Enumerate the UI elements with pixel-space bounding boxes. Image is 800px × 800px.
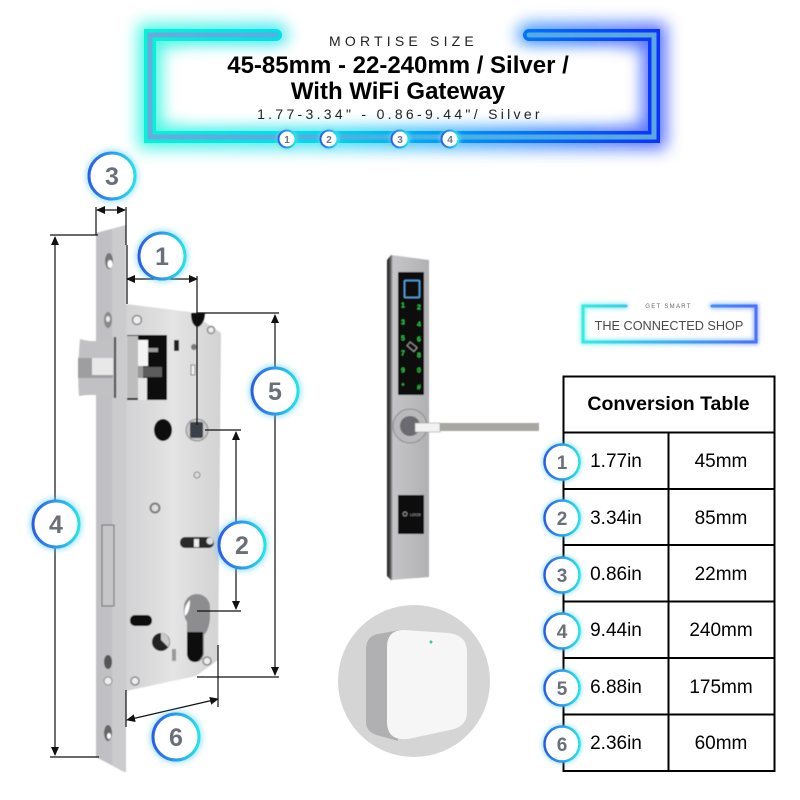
badge 2: [216, 519, 268, 571]
table row badges: 1: [557, 453, 568, 474]
table values: 60mm: [695, 733, 747, 754]
table values: 0.86in: [590, 564, 642, 585]
mortise lock body: [78, 225, 221, 772]
dimension 3 lines: [96, 207, 126, 245]
table values: 240mm: [689, 620, 753, 641]
table row badges: 6: [557, 735, 567, 756]
subtitle: mortise size: MORTISE SIZE: [329, 33, 478, 49]
keypad screen: 7: [401, 350, 405, 358]
lock label panel: LOCK: [410, 512, 421, 517]
frame step markers: 1: [284, 135, 290, 146]
cylinder cutout: [184, 594, 210, 662]
dimension 5 lines: [197, 313, 279, 677]
keypad screen: 1: [401, 302, 405, 310]
lever handle: [393, 409, 539, 443]
title text: [227, 52, 569, 105]
status led: [430, 640, 432, 644]
gateway backdrop circle: [338, 605, 490, 757]
conversion table: [542, 376, 775, 771]
badge 3: 3: [105, 163, 119, 191]
dimension 1 lines: [127, 245, 197, 425]
dimension 2 lines: [197, 430, 241, 611]
badge 4: [30, 498, 82, 550]
smart door lock: [387, 255, 539, 580]
table values: 9.44in: [590, 620, 642, 641]
keypad screen: 3: [401, 320, 405, 326]
keypad screen: 2: [417, 304, 421, 312]
table values: 3.34in: [590, 508, 642, 529]
latch window: [127, 335, 167, 400]
dimension 6 lines: [126, 645, 218, 727]
keypad screen: #: [417, 384, 421, 392]
table values: [590, 451, 753, 754]
frame step markers: 4: [447, 135, 453, 146]
keypad screen: 5: [401, 336, 405, 342]
brand logo: GET SMART: [645, 304, 692, 310]
lock label panel: [398, 495, 424, 534]
badge 6: 6: [169, 724, 183, 752]
badge 1: [136, 230, 188, 282]
keypad screen: 6: [417, 336, 421, 344]
title text: With WiFi Gateway: [291, 78, 506, 105]
keypad screen: *: [402, 383, 405, 390]
table row badges: 5: [557, 679, 568, 700]
table grid: [563, 376, 775, 771]
keypad screen: 0: [417, 368, 421, 374]
table values: 175mm: [689, 677, 753, 698]
badge 2: 2: [235, 532, 249, 560]
screws and holes: [102, 253, 214, 741]
table values: 1.77in: [590, 451, 642, 472]
badge 5: 5: [268, 378, 282, 406]
badge 4: 4: [49, 511, 63, 539]
lock plate: [387, 255, 429, 580]
wifi gateway: [338, 605, 490, 757]
table heading: Conversion Table: [587, 393, 750, 415]
frame step markers: 3: [397, 135, 403, 146]
table values: 45mm: [695, 451, 747, 472]
keypad screen: [398, 272, 424, 395]
keypad screen: 9: [401, 368, 405, 374]
badge 5: [249, 365, 301, 417]
gateway side: [366, 630, 400, 741]
badge 3: [86, 150, 138, 202]
table values: 2.36in: [590, 733, 642, 754]
table row badges: 2: [557, 509, 567, 530]
frame step markers: 2: [326, 135, 332, 146]
table values: 22mm: [695, 564, 747, 585]
inch size line: 1.77-3.34" - 0.86-9.44"/ Silver: [257, 106, 543, 122]
table values: 85mm: [695, 508, 747, 529]
latch bolt: [78, 337, 117, 398]
gateway front: [387, 630, 467, 739]
brand logo: [583, 304, 756, 342]
table row badges: 3: [557, 566, 567, 587]
lock case: [126, 304, 221, 691]
badge 1: 1: [155, 243, 169, 271]
badge 6: [150, 711, 202, 763]
frame step markers: [276, 128, 460, 150]
dimension 4 lines: [50, 235, 99, 757]
keypad screen: 4: [417, 322, 421, 328]
keypad screen: 8: [417, 352, 421, 360]
title text: 45-85mm - 22-240mm / Silver /: [227, 52, 569, 79]
table row badges: 4: [557, 622, 568, 643]
brand logo: THE CONNECTED SHOP: [595, 319, 743, 333]
table row badges: [542, 442, 582, 764]
face plate: [96, 225, 126, 772]
title frame: [150, 35, 654, 137]
table values: 6.88in: [590, 677, 642, 698]
